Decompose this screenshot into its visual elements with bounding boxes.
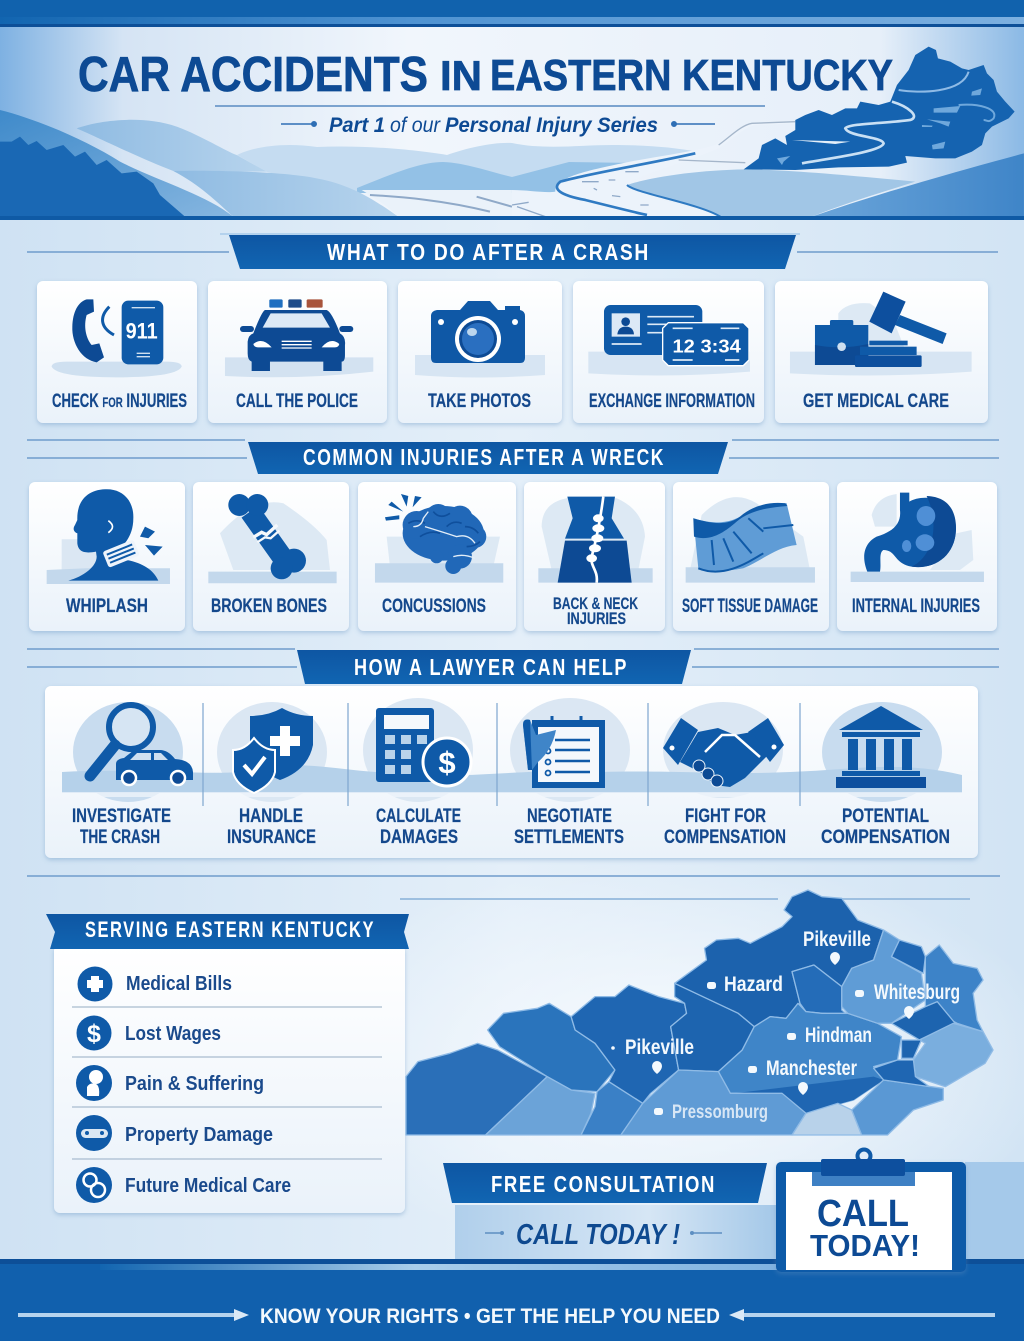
title: IN	[440, 52, 482, 99]
subtitle: of our	[390, 114, 441, 137]
row: medical bills: Medical Bills	[126, 973, 232, 995]
title: EASTERN KENTUCKY	[490, 51, 893, 100]
footer band	[0, 1259, 1024, 1341]
call to action strip: CALL TODAY !	[516, 1219, 680, 1251]
icon: magnifier and car	[90, 705, 193, 785]
label: GET MEDICAL CARE	[803, 391, 949, 412]
panel: concussions	[358, 482, 516, 631]
footer slogan with arrows: KNOW YOUR RIGHTS • GET THE HELP YOU NEED	[260, 1305, 720, 1328]
title: CAR ACCIDENTS	[78, 48, 428, 102]
call to action strip	[443, 1162, 1024, 1259]
panel: back and neck injuries	[524, 482, 665, 631]
label: SOFT TISSUE DAMAGE	[682, 596, 818, 617]
label: BACK & NECK	[553, 594, 639, 613]
header bottom rule	[0, 216, 1024, 220]
row: future medical care	[76, 1167, 291, 1203]
label: COMPENSATION	[821, 827, 950, 848]
icon: stomach	[851, 493, 984, 582]
ribbon heading	[46, 914, 409, 949]
map pins	[611, 952, 914, 1115]
row: medical bills	[78, 966, 232, 1002]
icon: spine and torso	[538, 497, 653, 583]
label: TAKE PHOTOS	[428, 391, 531, 412]
icon: brain	[375, 494, 503, 583]
row: lost wages	[76, 1016, 221, 1050]
map: eastern Kentucky	[406, 890, 993, 1135]
clipboard: call today: CALL	[817, 1193, 909, 1235]
map regions	[406, 890, 993, 1135]
icon: id card and clock: 12 3:34	[672, 336, 741, 357]
icon: police car	[225, 299, 373, 377]
map labels: Pikeville	[625, 1036, 694, 1059]
label: NEGOTIATE	[527, 806, 612, 827]
icon: Kentucky silhouette with river	[744, 47, 1015, 170]
subtitle: Personal Injury Series	[445, 114, 658, 137]
panel: internal injuries	[837, 482, 997, 631]
section rules	[27, 234, 1000, 899]
label: DAMAGES	[380, 827, 458, 848]
row: lost wages: Lost Wages	[125, 1023, 221, 1045]
title underline rule	[215, 105, 765, 107]
icon: phone and 911	[52, 299, 182, 377]
subtitle arrows	[281, 122, 715, 126]
icon: courthouse	[836, 706, 926, 788]
panel: check for injuries	[37, 281, 197, 423]
panel: how a lawyer can help	[45, 686, 978, 858]
icon: checklist and pen	[523, 716, 605, 788]
panel: soft tissue damage	[673, 482, 829, 631]
icon: handshake	[663, 718, 784, 787]
heading: common injuries after a wreck	[248, 442, 728, 474]
label: CALCULATE	[376, 806, 461, 827]
label: HANDLE	[239, 806, 303, 827]
dividers	[203, 703, 800, 806]
panel: broken bones	[193, 482, 349, 631]
map labels	[625, 928, 960, 1123]
map labels: Hazard	[724, 973, 783, 996]
footer slogan with arrows	[18, 1305, 995, 1328]
panel: call the police	[208, 281, 387, 423]
panel: whiplash	[29, 482, 185, 631]
label: INSURANCE	[227, 827, 316, 848]
row: lost wages: $	[87, 1020, 101, 1048]
header scene	[0, 27, 1024, 217]
icon: briefcase and gavel	[790, 292, 972, 375]
row: future medical care: Future Medical Care	[125, 1175, 291, 1197]
map labels: Pressomburg	[672, 1102, 768, 1123]
call to action strip: FREE CONSULTATION	[491, 1171, 716, 1197]
icon: id card and clock	[588, 305, 750, 375]
row: pain and suffering: Pain & Suffering	[125, 1073, 264, 1095]
row: pain and suffering	[76, 1065, 264, 1101]
map labels: Pikeville	[803, 928, 871, 951]
label: INVESTIGATE	[72, 806, 171, 827]
panel: get medical care	[775, 281, 988, 423]
heading: common injuries after a wreck: COMMON INJURIES AFTER A WRECK	[303, 444, 665, 470]
icon: phone and 911: 911	[126, 318, 158, 343]
label: EXCHANGE INFORMATION	[589, 391, 755, 412]
icon backdrops and hills	[45, 698, 978, 802]
label: WHIPLASH	[66, 596, 148, 617]
label: CHECK FOR INJURIES	[52, 391, 187, 412]
label: SETTLEMENTS	[514, 827, 624, 848]
icon: camera	[415, 301, 545, 378]
map labels: Manchester	[766, 1057, 857, 1080]
icon: broken bone	[208, 494, 337, 583]
clipboard: call today	[776, 1150, 966, 1272]
icon: head and neck brace	[47, 489, 170, 584]
icon: muscle band	[686, 497, 815, 583]
ribbon heading: SERVING EASTERN KENTUCKY	[85, 917, 375, 942]
label: CONCUSSIONS	[382, 596, 486, 617]
subtitle: Part 1	[329, 114, 385, 137]
icon: shields	[233, 708, 313, 793]
row: property damage	[76, 1115, 273, 1151]
label: POTENTIAL	[842, 806, 929, 827]
clipboard: call today: TODAY!	[810, 1228, 920, 1263]
panel: serving list	[46, 914, 409, 1213]
label: COMPENSATION	[664, 827, 786, 848]
heading: what to do after a crash	[229, 235, 796, 269]
heading: how a lawyer can help: HOW A LAWYER CAN HELP	[354, 654, 628, 680]
label: FIGHT FOR	[685, 806, 766, 827]
label: INJURIES	[567, 609, 626, 628]
panel: exchange information	[573, 281, 764, 423]
map labels: Hindman	[805, 1024, 872, 1047]
label: THE CRASH	[80, 827, 160, 848]
heading: what to do after a crash: WHAT TO DO AFTER A CRASH	[327, 239, 650, 265]
top bar	[0, 0, 1024, 27]
icon: calculator and coin	[376, 708, 471, 786]
label: BROKEN BONES	[211, 596, 327, 617]
row: property damage: Property Damage	[125, 1124, 273, 1146]
heading: how a lawyer can help	[297, 650, 691, 684]
label: CALL THE POLICE	[236, 391, 358, 412]
icon: calculator and coin: $	[438, 745, 456, 780]
map labels: Whitesburg	[874, 981, 960, 1004]
panel: take photos	[398, 281, 562, 423]
